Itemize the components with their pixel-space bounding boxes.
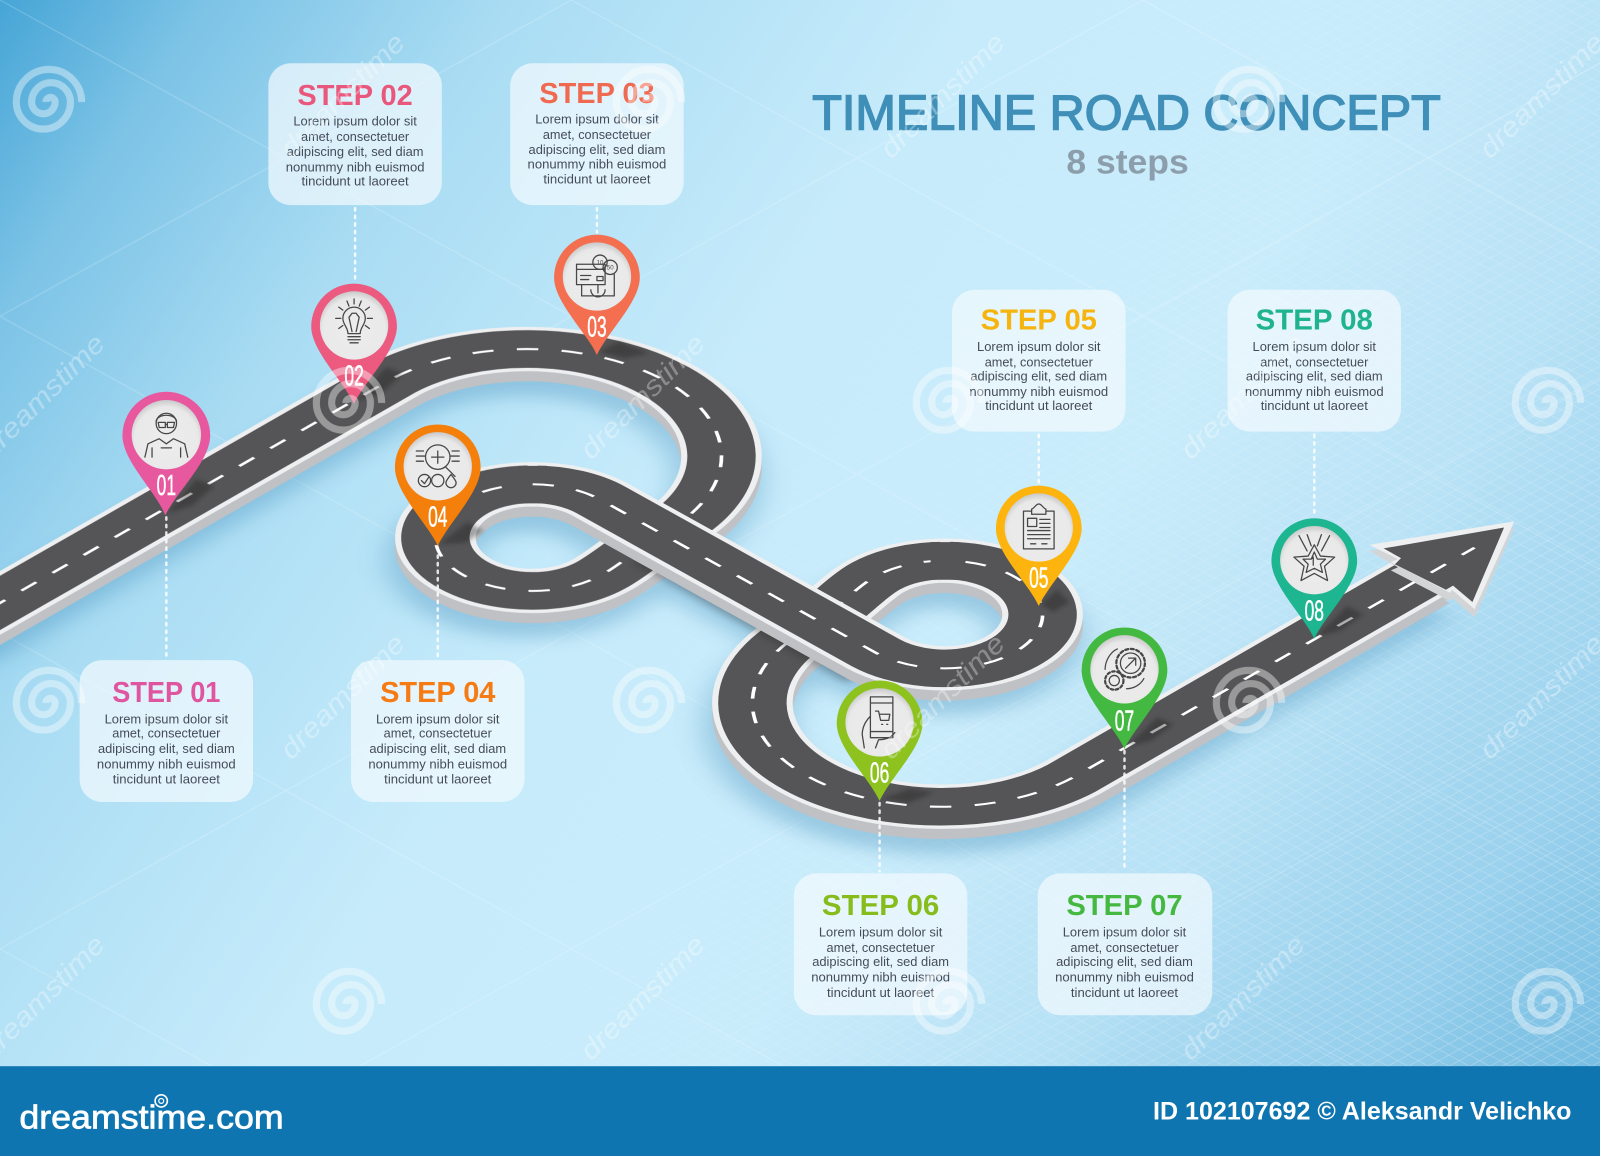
text: step 03 body: tincidunt ut laoreet [543,172,651,187]
connector: step 05 [1038,435,1040,484]
text: step 02 body: adipiscing elit, sed diam [287,144,424,159]
pin 02 [311,284,397,404]
text: step 04 body: tincidunt ut laoreet [384,772,492,787]
road: lower loop and arrow shaft [752,561,1420,817]
icon: person [145,413,188,457]
text: step 01 body: Lorem ipsum dolor sit [105,711,228,726]
text: step 05 body: Lorem ipsum dolor sit [977,339,1101,354]
text: step 01 body: amet, consectetuer [112,726,221,741]
text: step 02 body [286,113,424,189]
icon: hand holding phone [862,697,895,748]
pin 03 [554,235,640,355]
watermark text: dreamstime [574,929,711,1066]
heading: step 08: STEP 08 [1256,305,1373,337]
panel: step 03 [510,63,684,205]
connector: step 07 [1123,751,1126,871]
pin 07: 07 [1115,706,1134,738]
road: overpass straight and right loop [518,484,1043,678]
text: step 03 body: Lorem ipsum dolor sit [535,111,659,126]
watermark text: dreamstime [1473,27,1600,164]
title [812,87,1441,181]
footer bar [0,1066,1600,1156]
icon: magnifier and checks [416,445,459,488]
watermark text: dreamstime [1174,328,1311,465]
text: step 05 body: amet, consectetuer [985,354,1093,369]
heading: step 05: STEP 05 [981,305,1097,337]
connector: step 08 [1313,435,1315,516]
footer logo: dreamstime.com [19,1099,284,1136]
text: step 06 body [811,925,950,1000]
road: arrow head [1369,521,1514,617]
icon labels: coin values [597,259,614,271]
pin 05: 05 [1029,563,1048,595]
pin 04: 04 [428,501,448,533]
pin 01 [122,392,210,515]
text: step 07 body: nonummy nibh euismod [1055,970,1194,985]
text: step 06 body: tincidunt ut laoreet [827,985,935,1000]
heading: step 04: STEP 04 [380,677,496,709]
text: step 05 body: adipiscing elit, sed diam [970,369,1107,384]
text: step 05 body: tincidunt ut laoreet [985,398,1093,413]
footer credit: ID 102107692 © Aleksandr Velichko [1153,1097,1571,1125]
road shadow [0,371,1416,829]
text: step 08 body: adipiscing elit, sed diam [1246,369,1383,384]
icon labels: coin values: 50 [607,264,614,271]
icon: clipboard [1023,504,1054,549]
pin 01: 01 [157,470,176,502]
panel: step 04 [351,660,524,802]
text: step 04 body [368,711,507,787]
text: step 08 body: tincidunt ut laoreet [1261,398,1368,413]
pin 02: 02 [344,361,364,393]
heading: step 02: STEP 02 [297,80,413,112]
heading: step 06: STEP 06 [822,890,939,922]
text: step 06 body: amet, consectetuer [827,940,935,955]
subtitle: 8 steps [1066,143,1189,181]
text: step 04 body: Lorem ipsum dolor sit [376,711,500,726]
text: step 06 body: Lorem ipsum dolor sit [819,925,943,940]
connector: step 04 [437,548,439,658]
road: overpass shadow [663,548,876,667]
text: step 04 body: nonummy nibh euismod [368,756,507,771]
text: step 03 body: amet, consectetuer [543,127,652,142]
panel: step 05 [952,290,1126,432]
icon: gears with arrow [1105,649,1145,690]
connector: step 02 [354,208,356,282]
connector: step 01 [165,517,168,658]
text: step 08 body: Lorem ipsum dolor sit [1253,339,1376,354]
icon: card and coins [577,255,617,297]
text: step 07 body: Lorem ipsum dolor sit [1063,925,1187,940]
heading: step 03: STEP 03 [539,78,655,110]
heading: step 07: STEP 07 [1066,890,1183,922]
text: step 01 body: tincidunt ut laoreet [113,772,220,787]
title: TIMELINE ROAD CONCEPT [812,87,1441,141]
pin 04 [395,424,481,546]
panel: step 01 [80,660,253,802]
text: step 02 body: tincidunt ut laoreet [302,174,409,189]
text: step 05 body: nonummy nibh euismod [969,384,1108,399]
text: step 08 body: nonummy nibh euismod [1245,384,1384,399]
text: step 03 body: adipiscing elit, sed diam [529,142,665,157]
text: step 04 body: adipiscing elit, sed diam [369,741,506,756]
heading: step 01: STEP 01 [112,677,221,709]
text: step 06 body: adipiscing elit, sed diam [812,954,949,969]
text: step 02 body: amet, consectetuer [301,129,410,144]
text: step 07 body: adipiscing elit, sed diam [1056,954,1193,969]
panel: step 07 [1038,873,1212,1015]
icon labels: coin values: 10 [597,259,604,266]
text: step 07 body [1055,925,1194,1000]
pin 08 [1271,518,1357,639]
pin 08: 08 [1305,595,1324,627]
watermark text: dreamstime [874,628,1011,765]
text: step 03 body: nonummy nibh euismod [528,156,666,171]
watermark text: dreamstime [1473,628,1600,765]
text: step 06 body: nonummy nibh euismod [811,970,950,985]
text: step 08 body: amet, consectetuer [1260,354,1369,369]
icon: star award [1294,535,1335,581]
watermark text: dreamstime [274,27,411,164]
watermark text: dreamstime [274,628,411,765]
panel: step 06 [794,873,967,1015]
watermark text: dreamstime [574,328,711,465]
text: step 02 body: nonummy nibh euismod [286,159,424,174]
pin 06: 06 [870,758,889,790]
connector: step 06 [878,803,881,871]
pin 03: 03 [587,312,607,344]
watermark text: dreamstime [874,27,1011,164]
icon: light bulb [336,299,372,343]
panel: step 02 [268,63,442,205]
text: step 01 body: adipiscing elit, sed diam [98,741,235,756]
text: step 03 body [528,111,666,187]
watermark text: dreamstime [1174,929,1311,1066]
pin 05 [996,486,1082,606]
connector: step 03 [596,208,598,233]
text: step 07 body: amet, consectetuer [1070,940,1179,955]
pin shadows on road [167,342,1363,803]
text: step 07 body: tincidunt ut laoreet [1071,985,1178,1000]
text: step 01 body [97,711,236,787]
text: step 04 body: amet, consectetuer [384,726,492,741]
text: step 08 body [1245,339,1384,413]
road: first section and left loop [0,349,721,636]
road: centre dashes of lower loop [752,548,1474,807]
text: step 05 body [969,339,1108,413]
pin 06 [837,681,922,801]
text: step 02 body: Lorem ipsum dolor sit [293,113,417,128]
pin 07 [1082,627,1167,749]
text: step 01 body: nonummy nibh euismod [97,756,236,771]
panel: step 08 [1228,290,1401,432]
